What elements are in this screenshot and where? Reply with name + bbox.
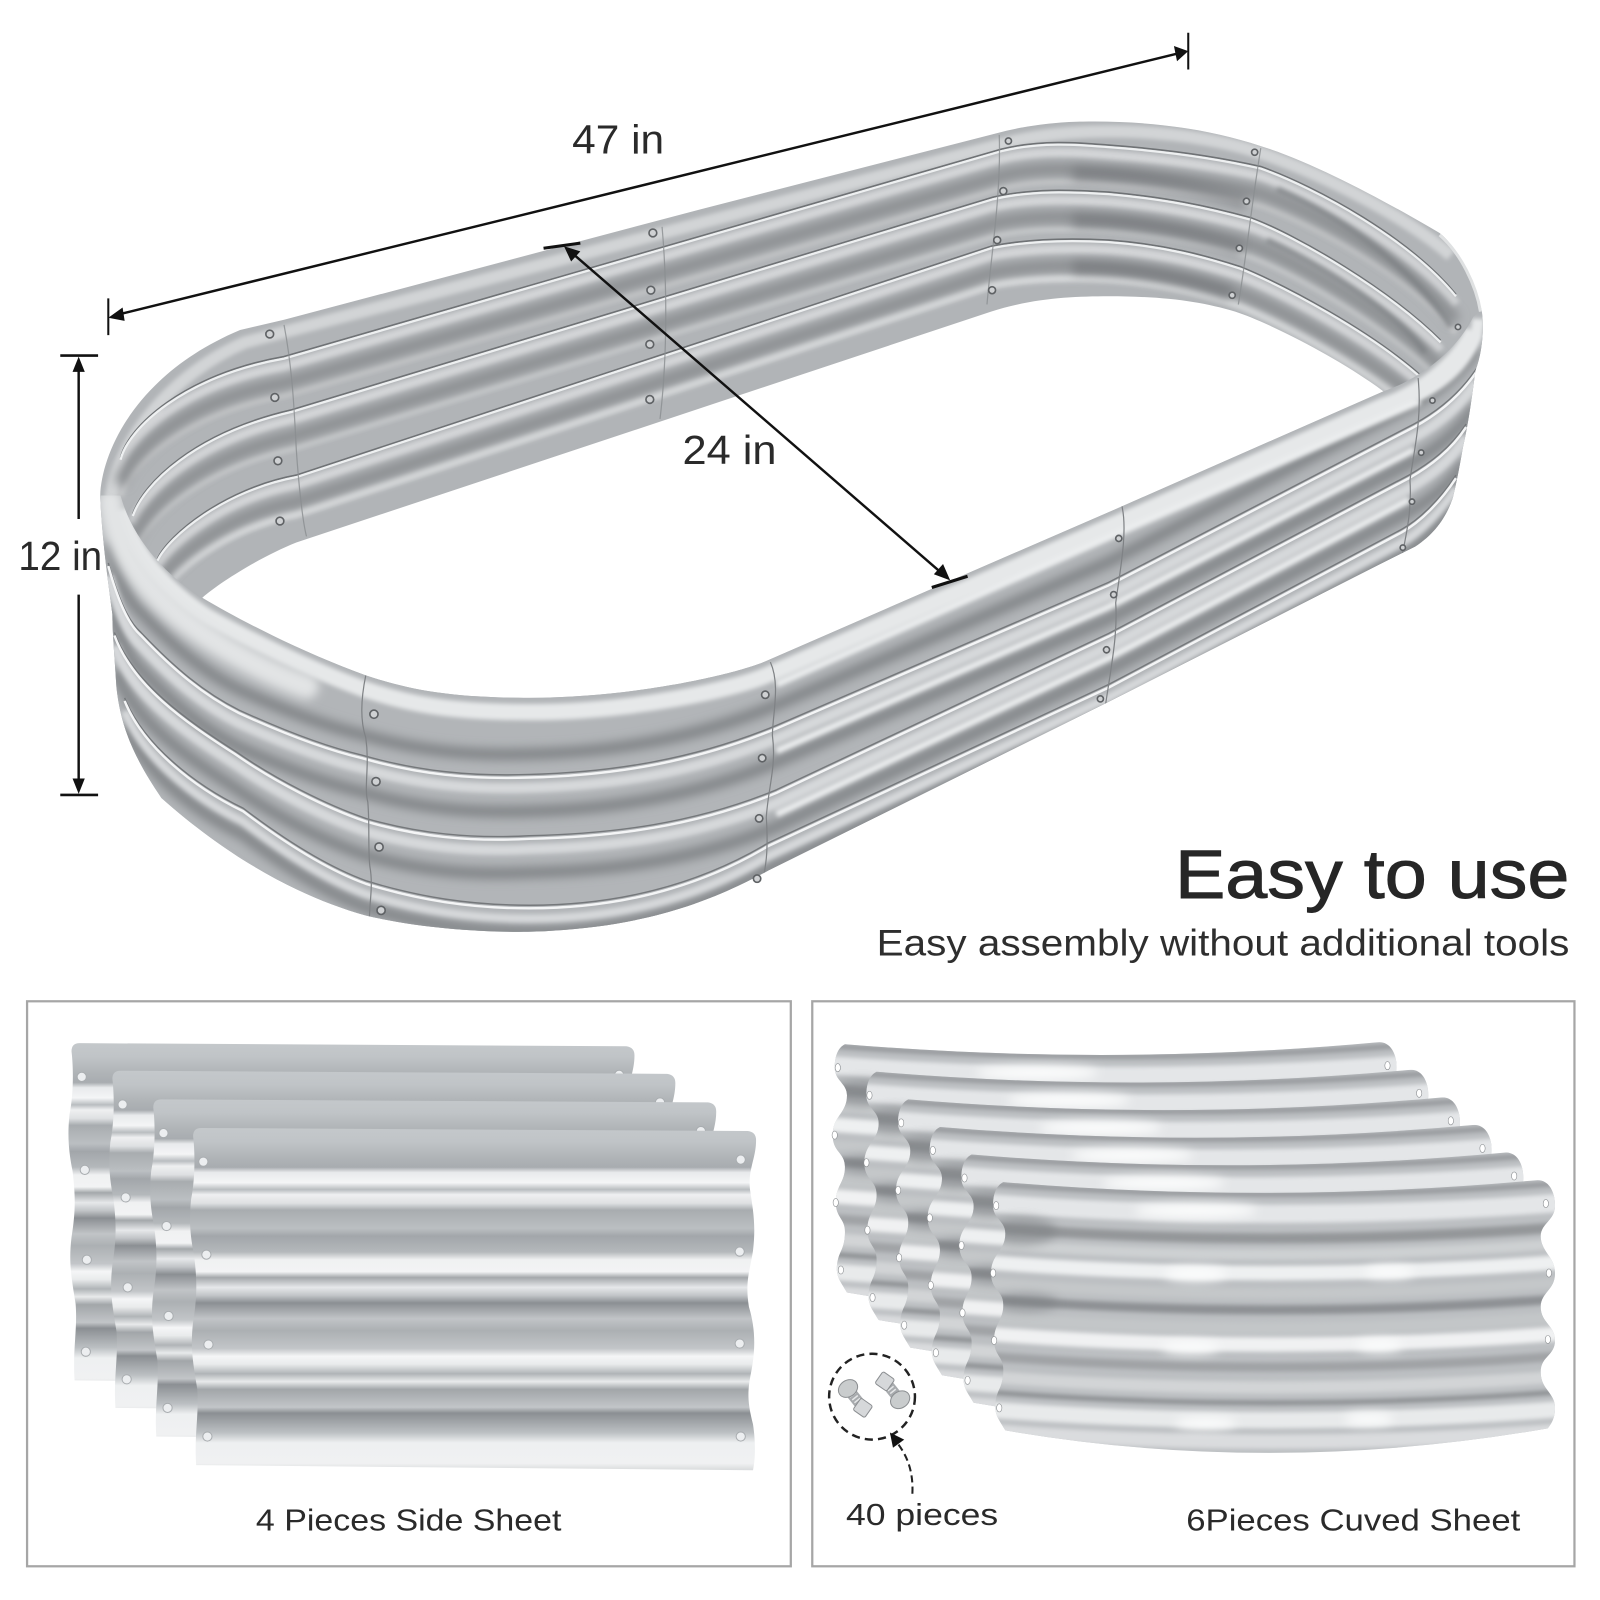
thin back rim at right end [1440,235,1480,312]
four stacked corrugated side sheets [68,1043,756,1470]
bolts [266,138,1461,914]
shading of corrugated ridges [108,348,1476,932]
dimension: length 47 in [108,33,1188,335]
bolts caption: 40 pieces [846,1498,998,1532]
panel: curved sheets [812,1001,1574,1566]
subtitle: Easy assembly without additional tools [877,922,1569,963]
top rim band of back wall [110,131,1456,598]
left rim highlight [110,501,307,687]
dimension: width 24 in: 24 in [683,427,777,473]
title: Easy to use [1175,836,1569,913]
panel seams on back wall [284,135,1261,536]
dimension: height 12 in: 12 in [18,533,102,579]
side sheet caption: 4 Pieces Side Sheet [256,1504,562,1538]
inner opening [202,296,1383,698]
curved sheet caption: 6Pieces Cuved Sheet [1186,1504,1521,1538]
dimension: width 24 in [544,243,968,587]
six stacked curved sheets [822,1032,1573,1476]
back inner wall [92,102,1502,950]
dimension: height 12 in [18,356,102,795]
dimension: length 47 in: 47 in [572,116,664,162]
front outer wall [92,286,1502,950]
seams [362,378,1419,925]
arrow: bolts pointer [890,1432,912,1494]
garden bed photo illustration [92,102,1502,950]
right rim highlight [1415,319,1478,396]
panel: side sheets [27,1001,791,1566]
icon: bolts in dashed circle [829,1354,915,1440]
